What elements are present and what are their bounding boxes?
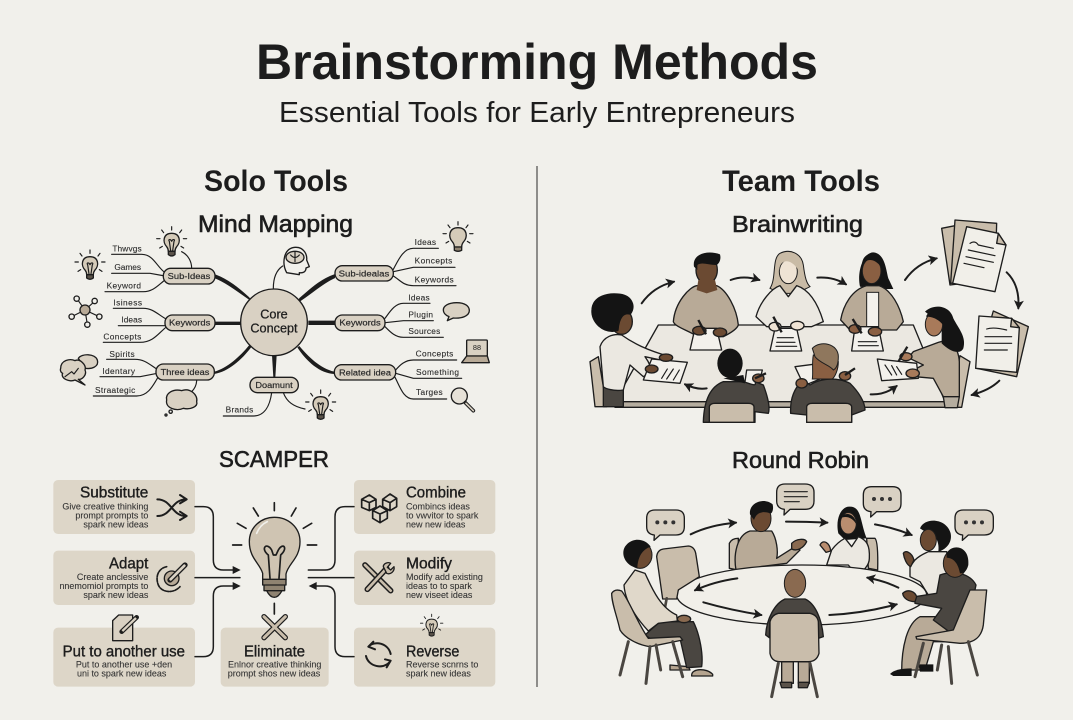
icon: thought cloud <box>165 390 197 416</box>
node: sub-idealas right: Sub-idealas <box>339 268 390 278</box>
round table <box>677 565 927 625</box>
card: adapt <box>53 551 195 605</box>
speech bubble: lines <box>777 484 814 515</box>
person: man front right <box>791 344 865 422</box>
speech bubble: right <box>955 510 993 540</box>
node: related idea: Related idea <box>339 367 391 377</box>
card: substitute: Give creative thinking <box>62 501 148 511</box>
card: put to another use: Put to another use +den <box>76 660 172 670</box>
title: Brainstorming Methods <box>256 34 818 90</box>
leaf labels: Thwvgs <box>112 244 142 254</box>
card: combine: Combincs ideas <box>406 501 470 511</box>
card: modify: new viseet ideas <box>406 590 473 600</box>
core concept node: Core <box>260 308 288 322</box>
card: substitute: prompt prompts to <box>75 510 148 520</box>
panel: brainwriting <box>590 220 1028 422</box>
icon: lower document stack <box>976 311 1028 377</box>
leaf labels <box>95 237 459 415</box>
icon: small bulb <box>420 614 443 636</box>
icon: refresh <box>366 642 391 667</box>
leaf labels: Sources <box>408 326 440 336</box>
icon: laptop: 88 <box>473 343 481 352</box>
card: put to another use <box>53 628 195 687</box>
leaf labels: Brands <box>226 405 253 415</box>
card: combine: Combine <box>406 485 466 502</box>
leaf labels: Spirits <box>109 349 135 359</box>
icon: top document stack <box>942 220 1006 292</box>
person: woman at top <box>820 507 878 577</box>
leaf labels: Targes <box>416 387 443 397</box>
icon: x mark <box>264 617 285 638</box>
card: reverse: spark new ideas <box>406 669 471 679</box>
icon: cubes <box>362 494 397 523</box>
node: sub-idealas right <box>335 266 393 281</box>
node: three ideas <box>156 364 214 380</box>
node: keywords left <box>165 315 215 331</box>
node: keywords right <box>335 315 385 331</box>
card: eliminate: Eliminate <box>244 643 305 660</box>
icon: bulb top right <box>443 222 473 251</box>
node: sub-ideas left: Sub-Ideas <box>168 271 211 281</box>
card: adapt: Adapt <box>109 556 149 573</box>
rotation arrows <box>691 522 912 615</box>
person: blond woman centre <box>756 251 823 351</box>
person: woman in blazer <box>841 252 903 351</box>
leaf labels: Koncepts <box>415 256 452 266</box>
card: reverse: Reverse <box>406 643 459 660</box>
card: eliminate: prompt shos new ideas <box>228 669 321 679</box>
leaf labels: Ideas <box>121 314 142 324</box>
flow arrows <box>642 258 1019 395</box>
leaf labels: Straategic <box>95 385 135 395</box>
icon: gear and pencil <box>157 565 185 592</box>
icon: thought clouds with chart <box>60 355 98 385</box>
person: man at front <box>766 569 823 697</box>
person: afro woman right <box>903 521 953 595</box>
card: modify: ideas to to spark <box>406 581 472 591</box>
heading: brainwriting: Brainwriting <box>732 211 863 237</box>
column divider <box>536 166 538 687</box>
person: man left with chair <box>612 540 713 683</box>
person: afro woman left <box>590 295 687 407</box>
heading: scamper: SCAMPER <box>219 446 329 472</box>
leaf labels: Ideas <box>415 237 436 247</box>
card: modify: Modify <box>406 556 452 573</box>
node: doamunt: Doamunt <box>255 380 293 390</box>
branches <box>214 275 335 377</box>
icon: bulb top left <box>157 227 187 256</box>
icon: network <box>69 296 102 327</box>
card: combine: new new ideas <box>406 519 466 529</box>
person: man right <box>890 547 987 683</box>
card: combine: to vwvitor to spark <box>406 510 479 520</box>
node: keywords left: Keywords <box>169 318 211 328</box>
card: adapt: spark new ideas <box>83 590 149 600</box>
icon: large lightbulb <box>233 503 317 614</box>
card: modify: Modify add existing <box>406 572 483 582</box>
icon: bulb bottom <box>306 390 336 419</box>
heading: solo tools: Solo Tools <box>204 165 348 198</box>
leaf labels: Concepts <box>416 349 453 359</box>
card: combine <box>354 480 495 534</box>
leaf labels: Concepts <box>103 331 141 341</box>
card: substitute <box>53 480 195 534</box>
leaf labels: Something <box>416 367 459 377</box>
heading: round robin: Round Robin <box>732 447 869 473</box>
icon: speech bubble <box>443 303 469 321</box>
card: reverse: Reverse scnrns to <box>406 660 478 670</box>
person: woman right <box>877 307 970 408</box>
leaf labels: Identary <box>102 366 136 376</box>
leaf labels: Keyword <box>107 280 141 290</box>
heading: mind mapping: Mind Mapping <box>198 211 353 238</box>
icon: tools <box>365 563 394 591</box>
person: man centre left <box>673 253 738 350</box>
icon: shuffle <box>157 495 187 520</box>
panel: mind map <box>60 222 489 419</box>
card: adapt: Create anclessive <box>77 572 148 582</box>
table <box>615 325 945 407</box>
speech bubble: left <box>647 510 684 540</box>
person: man at top <box>729 501 807 577</box>
icon: magnifier <box>451 388 473 411</box>
card: substitute: spark new ideas <box>83 519 149 529</box>
leaf labels: Plugin <box>408 309 433 319</box>
person: man front left <box>703 349 769 422</box>
icon: document and pencil <box>113 615 137 641</box>
panel: scamper <box>53 480 495 687</box>
card: put to another use: uni to spark new ideas <box>77 669 167 679</box>
leaf labels: Games <box>114 262 141 272</box>
card: put to another use: Put to another use <box>63 643 185 660</box>
core concept node: Concept <box>250 322 298 336</box>
node: related idea <box>334 365 396 380</box>
node: doamunt <box>250 377 298 393</box>
leaf labels: Keywords <box>415 274 454 284</box>
icon: bulb left <box>75 250 105 279</box>
node: keywords right: Keywords <box>339 318 381 328</box>
core concept node <box>241 289 307 356</box>
panel: round robin <box>612 484 993 697</box>
node: sub-ideas left <box>163 268 215 284</box>
connector lines <box>195 507 354 657</box>
node: three ideas: Three ideas <box>161 367 210 377</box>
card: substitute: Substitute <box>80 485 148 502</box>
card: eliminate: Enlnor creative thinking <box>228 660 321 670</box>
leaf labels: Ideas <box>408 292 430 302</box>
card: eliminate <box>221 628 329 687</box>
speech bubble: woman <box>863 487 901 517</box>
icon: laptop <box>462 340 489 363</box>
subtitle: Essential Tools for Early Entrepreneurs <box>279 97 795 129</box>
icon: head with brain <box>284 247 309 275</box>
heading: team tools: Team Tools <box>722 165 880 198</box>
card: modify <box>354 551 495 605</box>
card: adapt: nnemomiol prompts to <box>59 581 148 591</box>
leaf labels: Isiness <box>113 298 142 308</box>
card: reverse <box>354 628 495 687</box>
